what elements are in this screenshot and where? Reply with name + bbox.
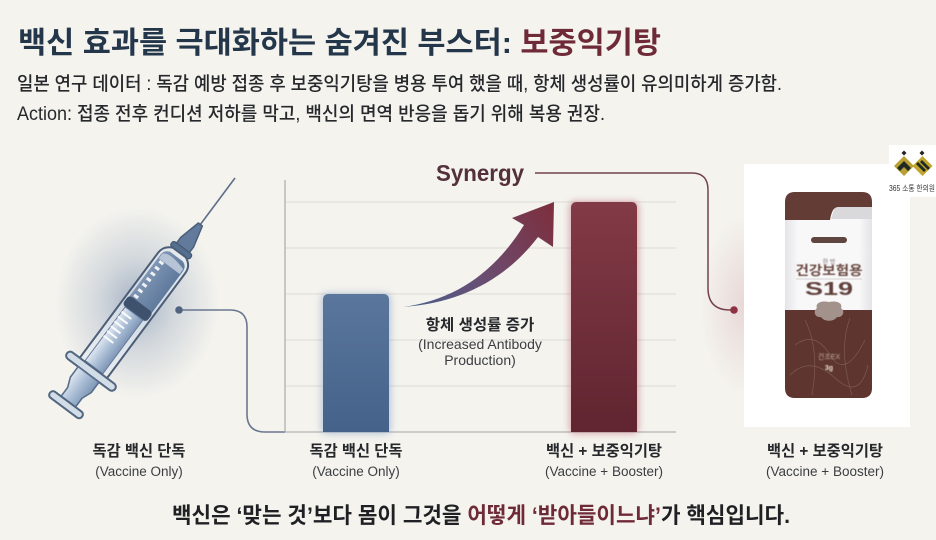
product sachet: S19	[805, 279, 853, 299]
label: red bar vaccine plus booster: 백신 + 보중익기탕	[546, 443, 662, 460]
icon: syringe	[40, 160, 259, 426]
product sachet: 건강보험용	[796, 263, 863, 278]
label: product vaccine plus booster	[766, 443, 884, 479]
subtitle: action: Action: 접종 전후 컨디션 저하를 막고, 백신의 면역 반응을 돕기 위해 복용 권장.	[17, 103, 605, 125]
label: blue bar vaccine only: 독감 백신 단독	[310, 443, 402, 460]
bar: vaccine + booster	[569, 201, 639, 434]
product sachet: 한 방	[823, 258, 836, 266]
label: red bar vaccine plus booster: (Vaccine + Booster)	[545, 464, 663, 479]
annotation: increased antibody production	[418, 316, 542, 368]
label: blue bar vaccine only	[310, 443, 402, 479]
logo: 365 clinic	[889, 145, 936, 197]
bar chart	[285, 180, 676, 434]
connector: synergy to product	[535, 173, 790, 395]
annotation: increased antibody production: Production)	[444, 352, 516, 368]
bar: vaccine only	[321, 293, 391, 434]
label: syringe vaccine only: (Vaccine Only)	[95, 464, 183, 479]
label: syringe vaccine only	[93, 443, 185, 479]
connector: syringe to blue bar	[175, 306, 285, 432]
product photo panel	[744, 164, 910, 427]
label: syringe vaccine only: 독감 백신 단독	[93, 443, 185, 460]
arrow: increase	[403, 202, 554, 307]
synergy label: Synergy	[436, 160, 524, 186]
annotation: increased antibody production: (Increased Antibody	[418, 336, 542, 352]
label: product vaccine plus booster: 백신 + 보중익기탕	[767, 443, 883, 460]
product sachet: 3g	[825, 365, 833, 372]
product sachet	[785, 192, 872, 398]
label: blue bar vaccine only: (Vaccine Only)	[312, 464, 400, 479]
subtitle: study data: 일본 연구 데이터 : 독감 예방 접종 후 보중익기탕을 병용 투여 했을 때, 항체 생성률이 유의미하게 증가함.	[17, 73, 782, 95]
title: 백신 효과를 극대화하는 숨겨진 부스터: 보중익기탕	[18, 27, 661, 60]
chart grid lines and axes	[285, 180, 676, 432]
bottom takeaway: 백신은 ‘맞는 것’보다 몸이 그것을 어떻게 ‘받아들이느냐’가 핵심입니다.	[172, 503, 790, 528]
label: product vaccine plus booster: (Vaccine + Booster)	[766, 464, 884, 479]
annotation: increased antibody production: 항체 생성률 증가	[426, 316, 534, 334]
product sachet: 건조EX	[818, 352, 840, 361]
label: red bar vaccine plus booster	[545, 443, 663, 479]
